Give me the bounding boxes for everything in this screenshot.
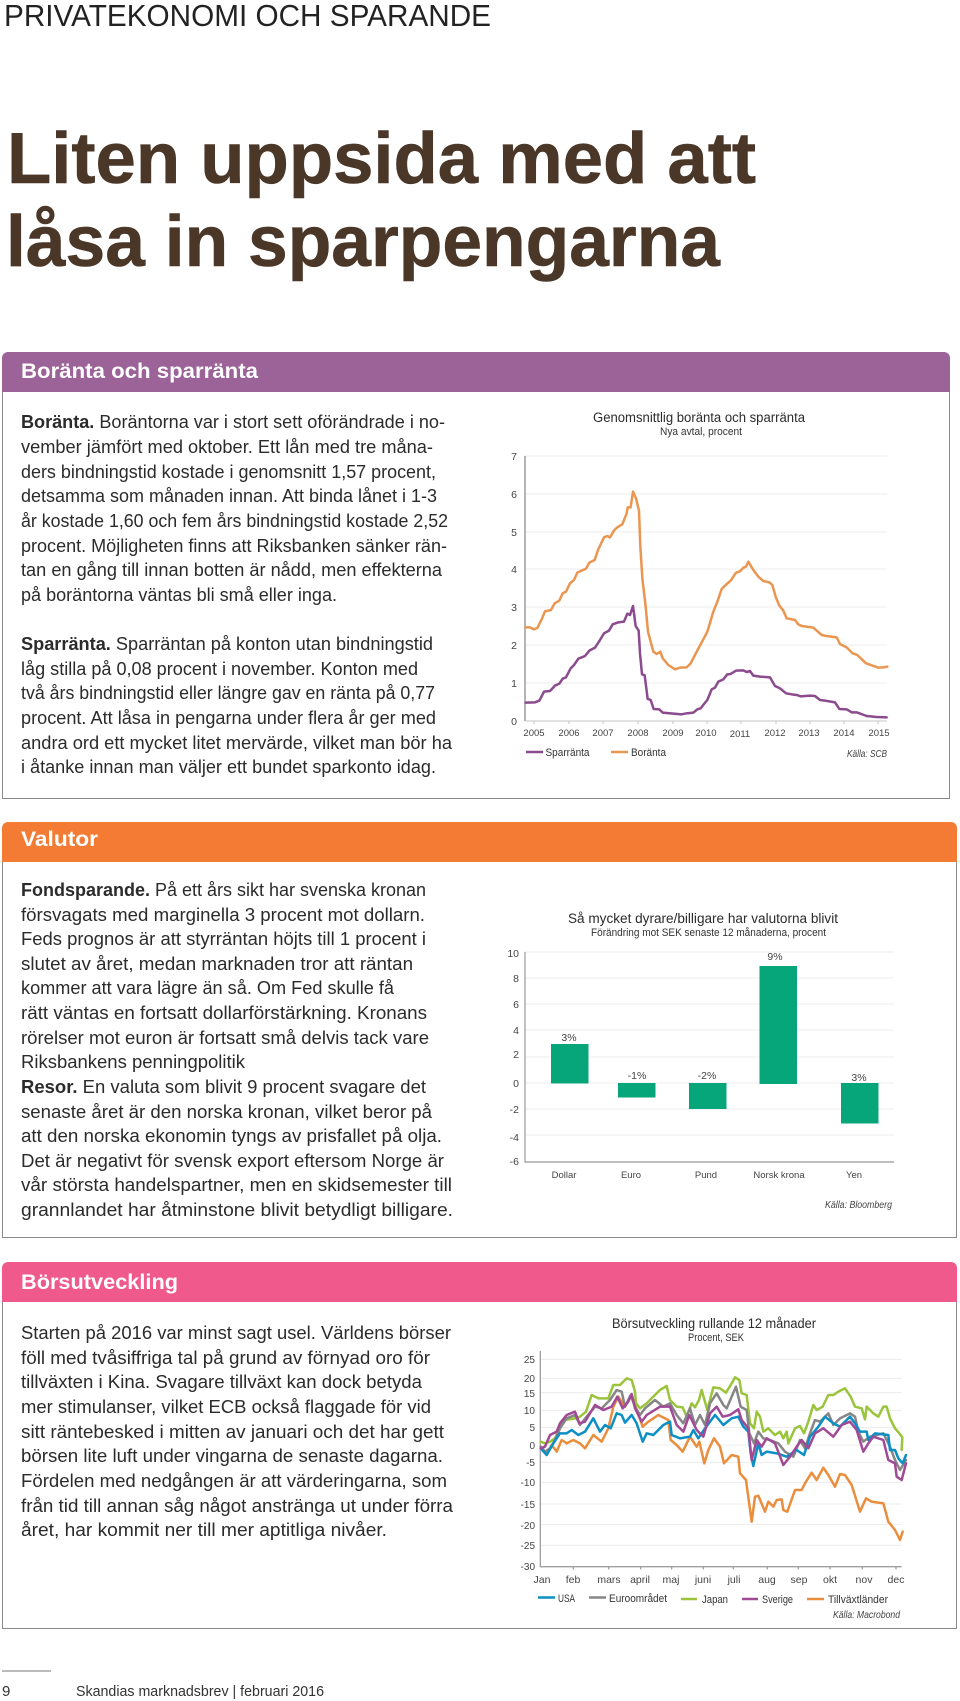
text block: Resor	[21, 1077, 453, 1220]
text block	[21, 1323, 454, 1540]
text block: Boränta: procent. Möjligheten finns att Riksbanken sänker rän-	[21, 536, 447, 556]
text block: Fondsparande: rörelser mot euron är fortsatt små delvis tack vare	[21, 1028, 429, 1048]
line chart: genomsnittlig boränta och sparränta	[511, 410, 890, 760]
x axis labels: 2012	[764, 728, 786, 739]
chart title: Procent, SEK	[688, 1332, 745, 1344]
text block: Fondsparande: kommer att vara lägre än så. Om Fed skulle få	[21, 978, 395, 998]
y axis labels: 5	[529, 1423, 535, 1434]
title: Liten uppsida med att	[7, 119, 756, 199]
text block: Resor: grannlandet har åtminstone blivit betydligt billigare.	[21, 1200, 453, 1220]
y axis labels: 8	[513, 973, 519, 985]
panel frame	[2, 862, 956, 1238]
panel header: Börsutveckling	[21, 1271, 178, 1294]
y axis labels: -10	[521, 1478, 535, 1489]
footer	[2, 1671, 324, 1700]
line: boränta	[526, 492, 887, 669]
x axis labels: 2010	[695, 728, 717, 739]
category labels: Norsk krona	[753, 1170, 805, 1181]
legend: Japan	[702, 1594, 728, 1606]
y axis labels: 1	[511, 678, 517, 690]
y axis labels: 5	[511, 527, 517, 539]
chart title: Förändring mot SEK senaste 12 månaderna, procent	[591, 927, 826, 939]
line: Sverige	[541, 1394, 906, 1480]
y axis labels: 10	[524, 1406, 535, 1417]
chart title: Så mycket dyrare/billigare har valutorna blivit	[568, 911, 838, 926]
y axis labels: 3	[511, 602, 517, 614]
y axis labels: -20	[521, 1521, 535, 1532]
bars	[551, 966, 878, 1124]
y axis labels: 4	[511, 564, 517, 576]
text block: Boränta: på boräntorna väntas bli små eller inga.	[21, 585, 337, 605]
x axis labels: mars	[597, 1574, 621, 1586]
text block: Resor: Det är negativt för svensk export eftersom Norge är	[21, 1151, 444, 1171]
text block: Resor: Resor. En valuta som blivit 9 procent svagare det	[21, 1077, 426, 1097]
line: Tillväxtländer	[541, 1395, 903, 1540]
text block: Fondsparande: Riksbankens penningpolitik	[21, 1052, 246, 1072]
x axis labels: feb	[566, 1574, 580, 1586]
x axis labels: okt	[823, 1574, 837, 1586]
text block: Fondsparande: slutet av året, medan marknaden tror att räntan	[21, 954, 413, 974]
bar value labels	[561, 951, 867, 1084]
footer: 9	[2, 1683, 10, 1700]
x axis labels	[523, 728, 890, 740]
x axis labels: juni	[694, 1574, 711, 1586]
legend: Euroområdet	[609, 1593, 667, 1605]
chart title: Genomsnittlig boränta och sparränta	[593, 410, 805, 425]
text block: Fondsparande: Fondsparande. På ett års sikt har svenska kronan	[21, 880, 426, 900]
bar value labels: 9%	[767, 951, 783, 963]
x axis labels: april	[630, 1574, 650, 1586]
y axis labels: 10	[507, 948, 519, 960]
text block: Resor: att den norska ekonomin tyngs av prisfallet på olja.	[21, 1126, 442, 1146]
category labels: Euro	[621, 1170, 641, 1181]
y axis labels: 0	[529, 1441, 535, 1452]
text block: Starten på 2016 var minst sagt usel. Världens börser	[21, 1323, 451, 1343]
source: Källa: SCB	[847, 749, 887, 760]
panel frame	[2, 392, 950, 798]
y axis labels	[507, 948, 519, 1168]
line: USA	[541, 1413, 906, 1466]
chart title: Börsutveckling rullande 12 månader	[612, 1316, 816, 1331]
chart title: Nya avtal, procent	[660, 426, 742, 438]
line: Japan	[541, 1377, 902, 1450]
panel header: Boränta och sparränta	[21, 360, 258, 383]
y axis labels: 25	[524, 1355, 535, 1366]
text block: Boränta: vember jämfört med oktober. Ett lån med tre måna-	[21, 437, 433, 457]
text block: Boränta: Boränta. Boräntorna var i stort sett oförändrade i no-	[21, 412, 445, 432]
panel: Boränta och sparränta	[2, 352, 950, 798]
x axis labels: 2007	[592, 728, 614, 739]
legend: USA	[558, 1593, 575, 1605]
chart title	[612, 1316, 816, 1344]
x axis labels: 2015	[868, 728, 890, 739]
x axis labels: aug	[758, 1574, 776, 1586]
x axis labels: 2011	[730, 729, 750, 740]
panel header	[2, 352, 950, 392]
y axis labels: -30	[521, 1562, 535, 1573]
y axis labels: -15	[521, 1500, 535, 1511]
text block: Sparränta: låg stilla på 0,08 procent i november. Konton med	[21, 659, 418, 679]
text block: Boränta: ders bindningstid kostade i genomsnitt 1,57 procent,	[21, 462, 436, 482]
text block: Fondsparande: rätt väntas en fortsatt dollarförstärkning. Kronans	[21, 1003, 427, 1023]
y axis labels: 0	[513, 1078, 519, 1090]
text block: Boränta: detsamma som månaden innan. Att binda lånet i 1-3	[21, 486, 437, 506]
category labels	[552, 1170, 862, 1181]
line: Euroområdet	[541, 1387, 906, 1470]
y axis labels: 7	[511, 451, 517, 463]
text block: Sparränta: Sparränta. Sparräntan på konton utan bindningstid	[21, 634, 433, 654]
y axis labels: 20	[524, 1374, 535, 1385]
source: Källa: Macrobond	[833, 1610, 900, 1621]
y axis labels: -5	[526, 1458, 535, 1469]
x axis labels: 2006	[558, 728, 580, 739]
x axis labels: juli	[727, 1574, 740, 1586]
legend	[526, 747, 667, 759]
text block: Fondsparande: Feds prognos är att styrräntan höjts till 1 procent i	[21, 929, 426, 949]
title	[6, 119, 756, 282]
y axis labels: -6	[510, 1156, 519, 1168]
legend: Sparränta	[546, 747, 590, 759]
x axis labels: dec	[888, 1574, 904, 1586]
legend	[538, 1593, 888, 1606]
source: Källa: Bloomberg	[825, 1200, 892, 1211]
y axis labels	[511, 451, 517, 728]
category labels: Dollar	[552, 1170, 576, 1181]
text block: året, har kommit ner till mer aptitliga nivåer.	[21, 1520, 387, 1540]
text block: Boränta: tan en gång till innan botten är nådd, men effekterna	[21, 560, 443, 580]
legend: Sverige	[762, 1594, 793, 1606]
text block: börsen lite luft under vingarna de senaste dagarna.	[21, 1446, 443, 1466]
panel frame	[2, 1302, 956, 1628]
text block: Sparränta: procent. Att låsa in pengarna under flera år ger med	[21, 708, 436, 728]
panel header	[2, 822, 957, 862]
category labels: Pund	[695, 1170, 717, 1181]
y axis labels: 6	[511, 489, 517, 501]
text block: Boränta: år kostade 1,60 och fem års bindningstid kostade 2,52	[21, 511, 448, 531]
text block: Sparränta	[21, 634, 453, 777]
y axis labels: 0	[511, 716, 517, 728]
panel: Valutor	[2, 822, 957, 1238]
text block: Fondsparande	[21, 880, 429, 1072]
text block: mer stimulanser, vilket ECB också flaggade för vid	[21, 1397, 431, 1417]
text block: Resor: senaste året är den norska kronan, vilket beror på	[21, 1102, 433, 1122]
x axis labels	[534, 1574, 904, 1586]
x axis labels: 2005	[523, 728, 545, 739]
y axis labels: 6	[513, 999, 519, 1011]
legend: Boränta	[631, 747, 667, 759]
chart title	[568, 911, 838, 939]
line chart: börsutveckling	[521, 1316, 906, 1621]
bar value labels: -1%	[628, 1070, 646, 1082]
text block: Fondsparande: försvagats med marginella 3 procent mot dollarn.	[21, 905, 425, 925]
text block: Sparränta: i åtanke innan man väljer ett bundet sparkonto idag.	[21, 757, 436, 777]
panel header: Valutor	[21, 828, 98, 851]
y axis labels: -25	[521, 1541, 535, 1552]
y axis labels: 2	[513, 1049, 519, 1061]
x axis labels: 2013	[798, 728, 820, 739]
footer: Skandias marknadsbrev | februari 2016	[76, 1683, 324, 1700]
text block: tillväxten i Kina. Svagare tillväxt kan dock betyda	[21, 1372, 423, 1392]
x axis labels: maj	[663, 1574, 679, 1586]
y axis labels: 4	[513, 1025, 519, 1037]
x axis labels: 2014	[833, 728, 855, 739]
x axis labels: Jan	[534, 1574, 551, 1586]
x axis labels: nov	[856, 1574, 873, 1586]
x axis labels: sep	[791, 1574, 808, 1586]
text block: föll med tvåsiffriga tal på grund av förnyad oro för	[21, 1348, 430, 1368]
x axis labels: 2009	[662, 728, 684, 739]
chart title	[593, 410, 805, 438]
panel: Börsutveckling	[2, 1262, 957, 1628]
title: låsa in sparpengarna	[6, 202, 721, 282]
bar value labels: -2%	[698, 1070, 716, 1082]
bar value labels: 3%	[561, 1032, 577, 1044]
text block: Resor: vår största handelspartner, men en skidsemester till	[21, 1175, 452, 1195]
line: sparränta	[526, 606, 887, 717]
legend: Tillväxtländer	[828, 1594, 888, 1606]
y axis labels: -2	[510, 1104, 519, 1116]
bar value labels: 3%	[851, 1072, 867, 1084]
x axis labels: 2008	[627, 728, 649, 739]
category labels: Yen	[846, 1170, 862, 1181]
text block: sitt räntebesked i mitten av januari och det har gett	[21, 1422, 444, 1442]
text block: från tid till annan såg något anstränga ut under förra	[21, 1496, 454, 1516]
bar chart: valutor	[507, 911, 894, 1211]
text block: Fördelen med nedgången är att värderingarna, som	[21, 1471, 447, 1491]
text block: Sparränta: andra ord ett mycket litet mervärde, vilket man bör ha	[21, 733, 453, 753]
text block: Sparränta: två års bindningstid eller längre gav en ränta på 0,77	[21, 683, 435, 703]
y axis labels: -4	[510, 1132, 519, 1144]
panel header	[2, 1262, 957, 1302]
y axis labels: 15	[524, 1389, 535, 1400]
y axis labels: 2	[511, 640, 517, 652]
y axis labels	[521, 1355, 535, 1573]
text block: Boränta	[21, 412, 448, 605]
